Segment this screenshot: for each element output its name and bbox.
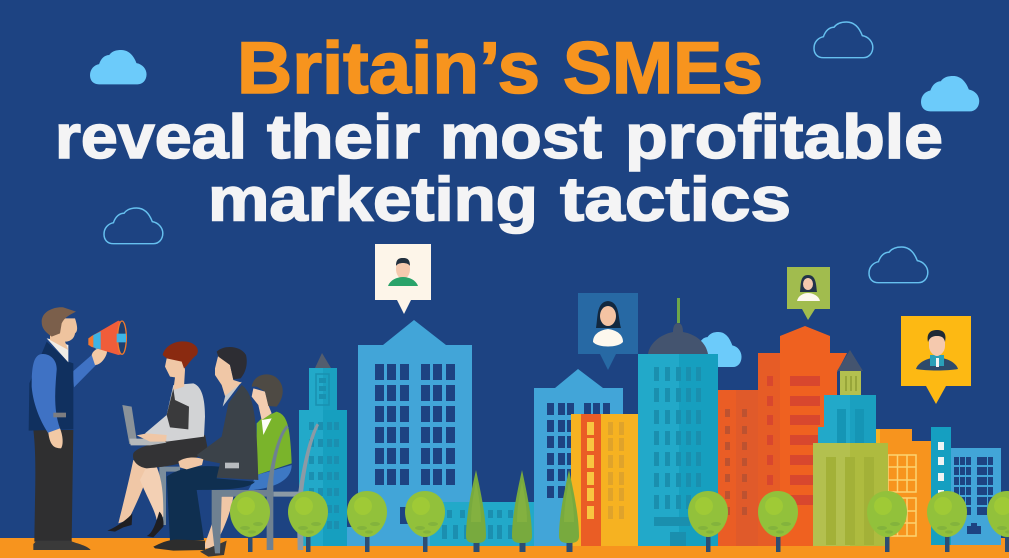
cloud: outline right [869,247,928,283]
speech bubble: man on yellow [901,316,971,404]
speech bubble: man on cream [375,244,431,314]
cloud: filled left [90,50,147,84]
speech bubble: woman on green [787,267,830,320]
tree: conifer [512,470,532,552]
title line 2: most [440,103,602,172]
building: yellow and orange [571,414,638,546]
cloud: filled right [921,76,979,111]
speech bubble: woman on blue [578,293,638,370]
group of people [29,307,319,557]
trees row [230,470,1009,552]
cloud: behind dome [690,332,742,367]
cloud: outline top right [814,22,873,58]
building: olive block [813,443,888,546]
person: man in dark suit [153,347,258,551]
building: low teal block [430,502,534,546]
title line 3: tactics [560,166,791,234]
title line 1 [237,28,763,109]
title [55,28,943,234]
title line 2: their [267,103,420,172]
building: teal tower left [299,353,347,546]
title line 2: reveal [55,103,247,172]
icon: megaphone [88,321,126,355]
tree [230,491,270,552]
chair: woman's seat [159,467,180,525]
tree [927,491,967,552]
chair: front [212,425,289,553]
person: man with megaphone [29,307,107,550]
building: blue right [951,448,1001,545]
title line 1: Britain’s [237,28,540,109]
ground [0,538,1009,558]
title line 3: marketing [208,166,538,234]
tree: conifer [466,470,486,552]
tree: conifer [559,470,579,552]
title line 1: SMEs [563,28,763,109]
tree [688,491,728,552]
title line 2 [55,103,943,172]
building: teal stepped block [818,395,876,445]
tree [867,491,907,552]
chair: back [273,423,319,550]
title line 3 [208,166,791,234]
tree [288,491,328,552]
cloud: outline left [104,208,163,244]
building: light blue behind yellow [534,369,623,546]
building: tall light blue [347,320,472,546]
person: woman in green [200,374,292,557]
building: tall orange [758,326,847,546]
building: teal domed tower [638,298,718,546]
building: orange left block [718,390,760,546]
person: woman with laptop [107,341,207,537]
tree [347,491,387,552]
tree [758,491,798,552]
building: small tower with grey roof [837,350,863,397]
building: orange right [876,429,932,545]
title line 2: profitable [625,103,943,172]
tree [987,491,1009,552]
tree [405,491,445,552]
building: teal narrow right [931,427,951,545]
